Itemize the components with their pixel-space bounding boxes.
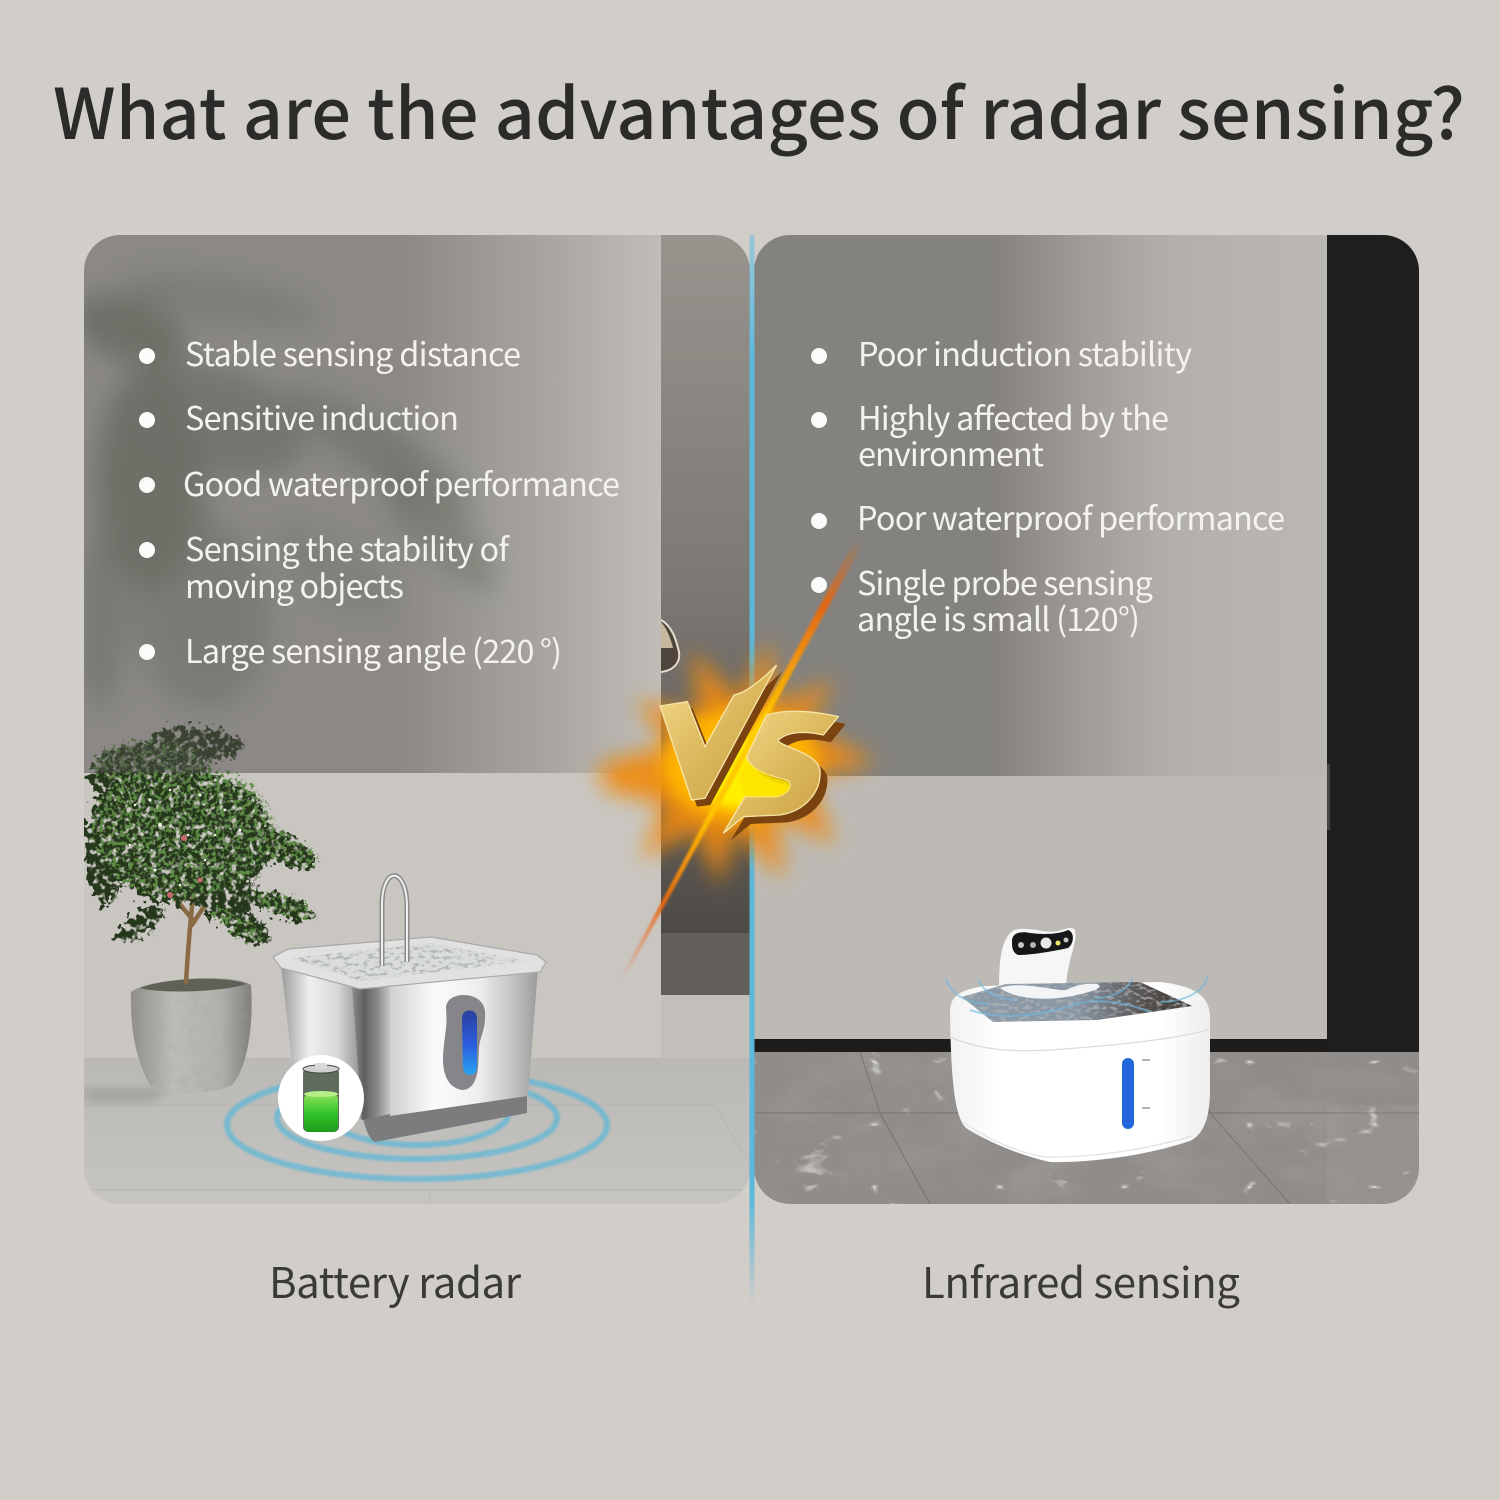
item: stable distance: Stable sensing distance xyxy=(185,329,521,376)
explosion glow xyxy=(598,640,875,885)
list: infrared drawbacks xyxy=(811,329,1285,641)
radar rings xyxy=(227,1071,607,1179)
item: waterproof: Good waterproof performance xyxy=(183,459,620,506)
diagonal streak xyxy=(617,540,862,985)
lid seam xyxy=(950,1030,1208,1051)
wall xyxy=(754,235,1327,1045)
trunk xyxy=(172,890,205,982)
item: moving objects xyxy=(139,524,510,608)
water tray xyxy=(962,982,1192,1022)
wall xyxy=(84,235,661,1065)
water xyxy=(290,943,528,981)
left face xyxy=(281,965,362,1120)
item: small angle: Single probe sensing xyxy=(857,558,1153,605)
level window xyxy=(443,995,485,1090)
sensor handle xyxy=(999,928,1075,992)
level marks xyxy=(1142,1060,1150,1108)
base seam xyxy=(963,1122,1192,1157)
battery xyxy=(303,1063,339,1132)
label: battery radar: Battery radar xyxy=(269,1250,522,1311)
bright core xyxy=(738,760,790,797)
item: poor waterproof: Poor waterproof performance xyxy=(857,493,1285,540)
item: environment: Highly affected by the xyxy=(858,393,1169,440)
dark door column xyxy=(1327,235,1419,1055)
spout xyxy=(382,876,407,966)
letters xyxy=(660,665,846,841)
highlight speckles xyxy=(129,789,242,886)
label: infrared sensing: Lnfrared sensing xyxy=(922,1250,1240,1311)
base xyxy=(363,1096,527,1142)
dark translucent overlay xyxy=(84,235,661,773)
V shadow xyxy=(665,672,782,807)
plant xyxy=(85,727,328,1093)
sensor panel xyxy=(1012,930,1073,955)
panel: battery radar xyxy=(63,235,750,1204)
baseboard xyxy=(754,1039,1327,1052)
foliage xyxy=(85,727,328,950)
V xyxy=(660,665,777,800)
blurred plant shadow xyxy=(84,275,500,708)
item: poor stability: Poor induction stability xyxy=(858,329,1192,376)
stainless fountain xyxy=(273,876,546,1142)
item: small angle xyxy=(811,558,1153,641)
S xyxy=(723,711,838,833)
doorway xyxy=(661,235,750,1070)
S shadow xyxy=(731,719,846,841)
rim xyxy=(273,937,546,989)
right face xyxy=(390,968,538,1116)
marble floor xyxy=(754,1052,1419,1204)
item: sensitive induction: Sensitive induction xyxy=(185,393,459,440)
pot xyxy=(131,978,252,1093)
floor xyxy=(84,1058,750,1204)
divider line xyxy=(750,235,754,1305)
corner xyxy=(352,985,392,1120)
title: What are the advantages of radar sensing? xyxy=(53,59,1465,160)
translucent overlay xyxy=(754,235,1220,776)
VS badge xyxy=(598,540,875,985)
item: environment: environment xyxy=(858,429,1044,476)
sensing waves xyxy=(946,976,1208,1016)
body xyxy=(950,982,1210,1162)
item: moving objects: Sensing the stability of xyxy=(185,524,510,571)
battery badge xyxy=(278,1055,364,1141)
white fountain xyxy=(946,928,1210,1162)
item: sensing angle: Large sensing angle (220 °) xyxy=(185,626,562,673)
list: radar advantages xyxy=(139,329,620,673)
water level window xyxy=(1122,1058,1134,1129)
handbag in doorway xyxy=(661,620,679,672)
item: moving objects: moving objects xyxy=(185,561,404,608)
item: environment xyxy=(811,393,1169,476)
panel: infrared sensing xyxy=(754,235,1419,1204)
item: small angle: angle is small (120°) xyxy=(857,594,1140,641)
